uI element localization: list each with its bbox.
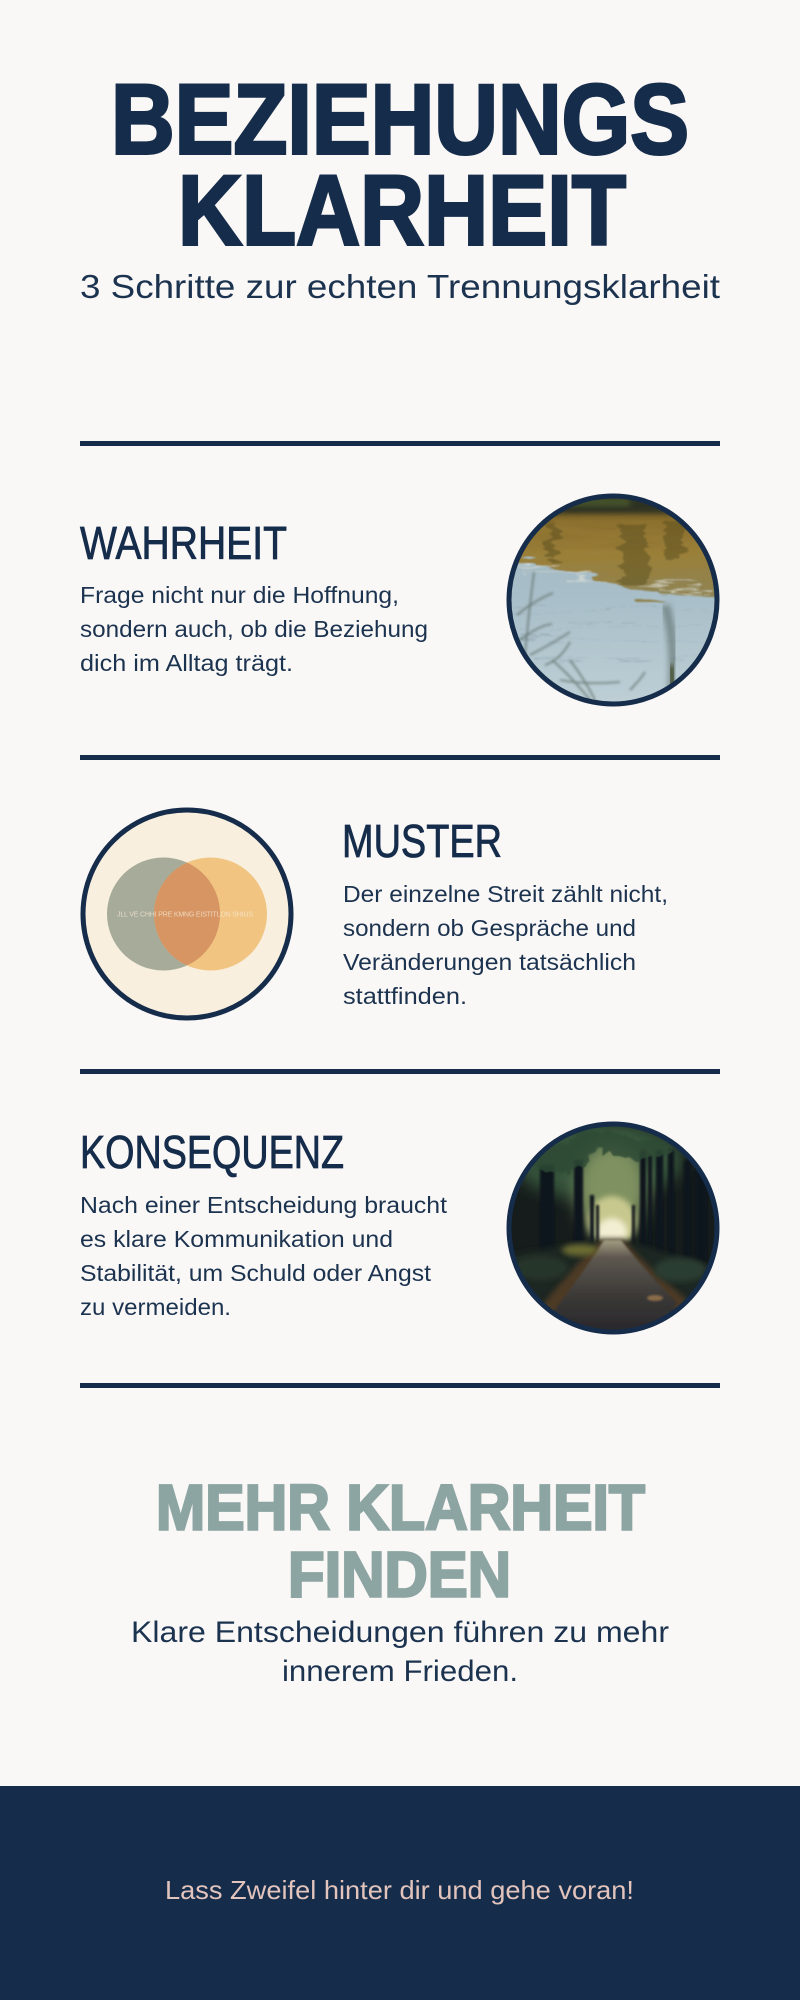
text: call to action body [131, 1616, 669, 1688]
panel: Muster [83, 810, 668, 1018]
text: Muster body: stattfinden. [343, 983, 467, 1009]
text: Wahrheit body [80, 582, 428, 676]
text: Konsequenz body [80, 1192, 448, 1320]
text: Muster body: sondern ob Gespräche und [343, 915, 636, 941]
heading: call to action [156, 1472, 645, 1610]
panel: Wahrheit [80, 480, 736, 710]
heading: Konsequenz: KONSEQUENZ [80, 1126, 344, 1178]
footer text: Lass Zweifel hinter dir und gehe voran! [165, 1875, 634, 1905]
text: Wahrheit body: Frage nicht nur die Hoffnung, [80, 582, 399, 608]
panel: Konsequenz [80, 1120, 721, 1336]
text: Wahrheit body: sondern auch, ob die Beziehung [80, 616, 428, 642]
text: call to action body: Klare Entscheidungen führen zu mehr [131, 1616, 669, 1649]
text: Konsequenz body: Nach einer Entscheidung braucht [80, 1192, 448, 1218]
title [111, 64, 689, 266]
text: Wahrheit body: dich im Alltag trägt. [80, 650, 293, 676]
heading: Wahrheit: WAHRHEIT [80, 517, 287, 569]
heading: call to action: MEHR KLARHEIT [156, 1472, 645, 1544]
image: venn diagram [83, 810, 291, 1018]
title: BEZIEHUNGS [111, 64, 689, 174]
heading: call to action: FINDEN [288, 1538, 511, 1610]
subtitle: 3 Schritte zur echten Trennungsklarheit [80, 268, 720, 305]
text: Muster body [343, 881, 668, 1009]
footer band [0, 1786, 800, 2000]
text: call to action body: innerem Frieden. [282, 1655, 518, 1688]
text: Muster body: Der einzelne Streit zählt nicht, [343, 881, 668, 907]
text: Muster body: Veränderungen tatsächlich [343, 949, 636, 975]
text: Konsequenz body: Stabilität, um Schuld oder Angst [80, 1260, 432, 1286]
heading: Muster: MUSTER [342, 815, 502, 867]
image: venn diagram: JLL VE CHHI PRE KMNG EISTITLON SHIUS [117, 912, 253, 918]
image: forest path [505, 1120, 721, 1336]
image: lake [506, 494, 720, 706]
title: KLARHEIT [178, 154, 626, 266]
text: Konsequenz body: es klare Kommunikation und [80, 1226, 393, 1252]
text: Konsequenz body: zu vermeiden. [80, 1294, 231, 1320]
